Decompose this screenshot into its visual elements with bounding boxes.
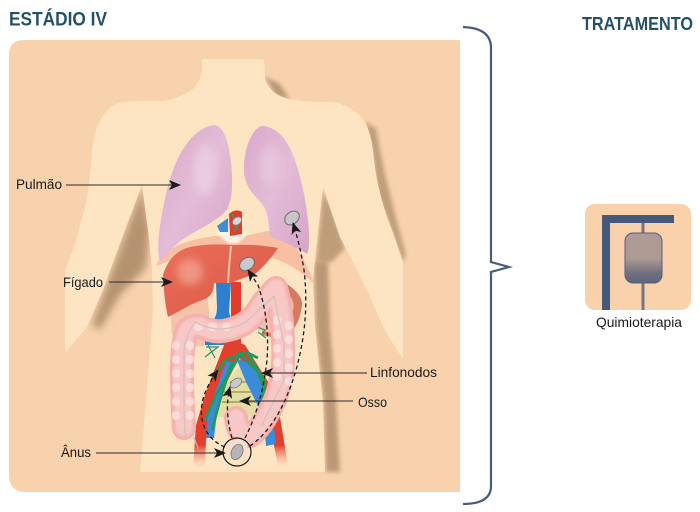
- label: Osso: Osso: [358, 394, 387, 410]
- label: Fígado: [63, 274, 172, 290]
- icon: central vessels upper: [205, 282, 241, 345]
- icon: left lung: [244, 126, 309, 254]
- brace connector: [463, 27, 509, 504]
- label: Pulmão: Pulmão: [16, 176, 62, 192]
- panel: chemotherapy treatment: [585, 204, 691, 330]
- icon: iliac arteries and veins: [193, 340, 288, 468]
- arrows: dashed metastatic spread paths: [201, 223, 306, 447]
- label: Linfonodos: Linfonodos: [370, 364, 437, 380]
- title: Estádio IV: ESTÁDIO IV: [9, 8, 107, 30]
- label: Fígado: Fígado: [63, 274, 103, 290]
- icon: lymph node network: [205, 325, 268, 430]
- icon: IV bag: [625, 233, 662, 283]
- icon: liver metastasis: [237, 254, 257, 274]
- icon: IV stand: [602, 215, 674, 310]
- label: Quimioterapia: Quimioterapia: [596, 314, 682, 330]
- icon: right lung: [158, 125, 232, 261]
- icon: organ behind colon: [170, 292, 209, 347]
- icon: pelvic bone: [214, 368, 264, 420]
- icon: anus and tumour: [223, 438, 251, 466]
- icon: lung metastasis: [282, 208, 302, 228]
- icon: stomach: [258, 282, 302, 340]
- body silhouette: [65, 59, 403, 472]
- panel: anatomy illustration: [9, 40, 460, 492]
- body shadows: [92, 76, 406, 472]
- icon: IV tube: [642, 223, 644, 310]
- card: [585, 204, 691, 310]
- label: Ânus: Ânus: [61, 444, 91, 460]
- panel background: [9, 40, 460, 492]
- icon: bone metastasis: [228, 376, 244, 390]
- icon: diaphragm band: [156, 231, 314, 284]
- icon: trachea and vessel above liver: [217, 210, 243, 236]
- icon: liver: [163, 244, 278, 317]
- icon: colon: [176, 288, 289, 448]
